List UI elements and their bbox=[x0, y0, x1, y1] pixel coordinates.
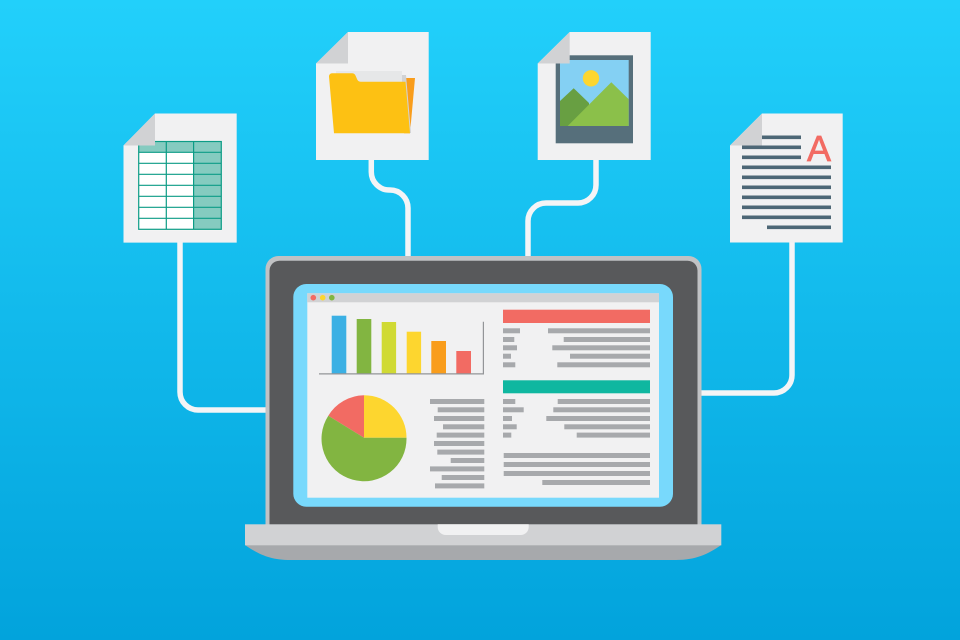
window panel bbox=[307, 293, 659, 498]
pie chart bbox=[322, 395, 407, 481]
icon: spreadsheet document bbox=[124, 114, 237, 243]
laptop base deck bbox=[245, 524, 721, 545]
paragraph lines bbox=[504, 453, 650, 485]
icon: text document: A bbox=[807, 128, 831, 169]
screen frame bbox=[293, 284, 673, 507]
window title bar bbox=[307, 293, 659, 302]
red table rows bbox=[503, 328, 650, 367]
icon: picture document bbox=[538, 32, 651, 160]
bar chart bbox=[319, 316, 483, 374]
trackpad notch bbox=[438, 524, 529, 535]
icon: folder document bbox=[316, 32, 429, 160]
laptop bbox=[245, 256, 721, 560]
teal table header bbox=[503, 380, 650, 393]
icon: text document bbox=[730, 114, 843, 242]
teal table rows bbox=[503, 399, 650, 438]
red table header bbox=[503, 310, 650, 323]
bezel bbox=[270, 261, 698, 525]
laptop lid bbox=[266, 256, 702, 531]
laptop base underside bbox=[245, 545, 721, 560]
connector lines bbox=[180, 158, 792, 410]
pie legend lines bbox=[430, 399, 484, 488]
